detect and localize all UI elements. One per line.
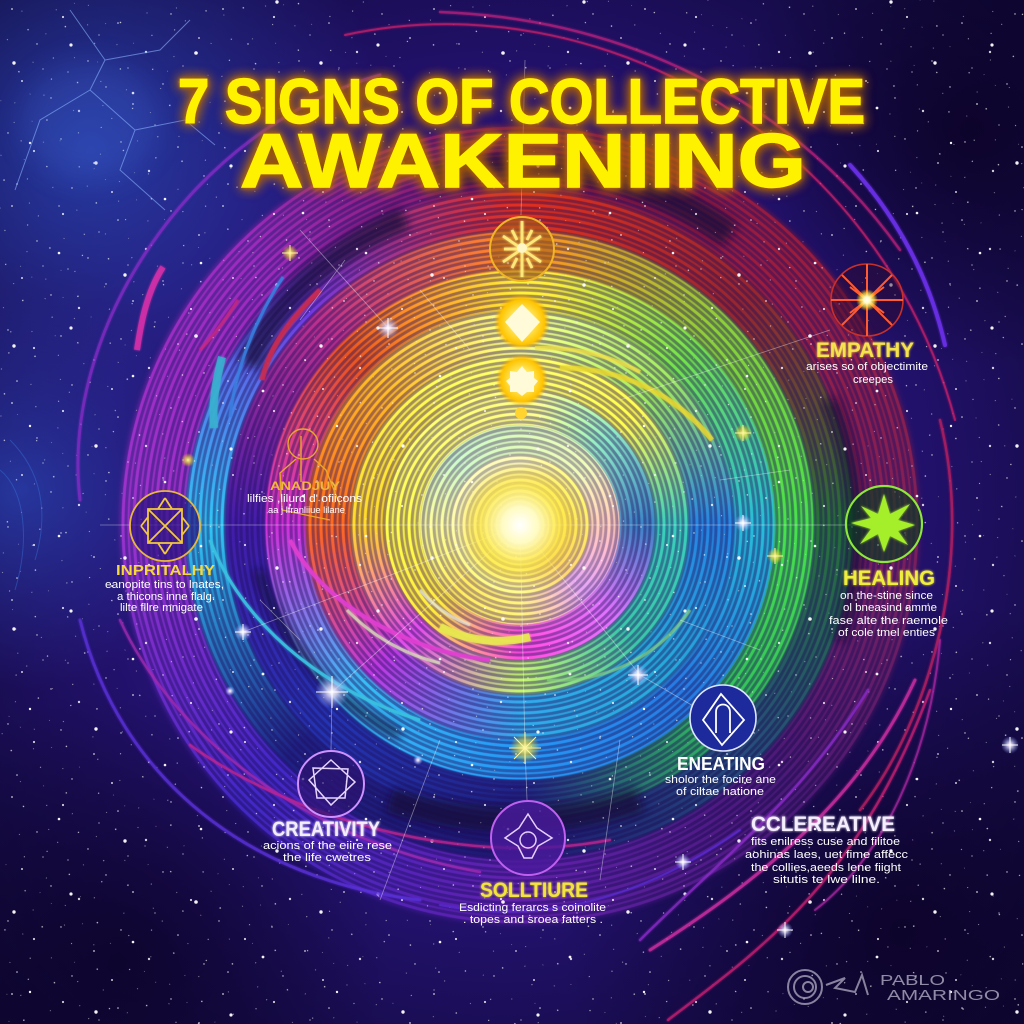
icon: eneating diamond	[690, 685, 756, 751]
sign: healing: fase alte the raemole	[829, 615, 948, 627]
bright streaks in the spiral	[137, 267, 712, 720]
sign: anadjuy: lilfies ,lilurd d' ofiicons	[247, 493, 363, 505]
sign: inpritalhy: INPRITALHY	[116, 562, 215, 579]
spiral: soft colour bands	[118, 124, 922, 926]
sign: creativity: CREATIVITY	[272, 818, 380, 841]
icon: person outline	[280, 429, 340, 520]
watermark: AMARINGO	[887, 987, 1000, 1004]
title: 7 SIGNS OF COLLECTIVE	[178, 67, 865, 137]
sign: healing: HEALING	[843, 567, 935, 590]
icon: healing star	[846, 486, 922, 562]
title: AWAKENIING	[240, 119, 806, 204]
sign: ccleative: fits enilress cuse and filitoe	[751, 836, 900, 848]
radial scratch lines	[100, 60, 880, 900]
watermark: PABLO	[880, 972, 945, 989]
sign: creativity: the life cwetres	[283, 852, 372, 864]
sign: healing	[829, 486, 948, 639]
sign: eneating: ENEATING	[677, 754, 765, 774]
sign: anadjuy	[247, 429, 363, 520]
sign: ccleative: the collies,aeeds lene fiight	[751, 862, 901, 874]
sign: creativity: acions of the eiire rese	[263, 840, 392, 852]
icon: empathy star	[831, 264, 903, 336]
sparkle stars	[181, 245, 1019, 938]
sign: healing: of cole tmel enties	[838, 627, 936, 639]
sign: ccleative: aohinas laes, uet fime affecc	[745, 849, 909, 861]
sign: ccleative	[745, 813, 909, 886]
sign: anadjuy: ANADJUY	[270, 479, 340, 493]
sign: empathy: EMPATHY	[816, 339, 914, 362]
sign: healing: on the-stine since	[840, 590, 933, 602]
sign: inpritalhy: lilte fllre mnigate	[120, 602, 203, 614]
icon: top star medallion	[490, 217, 554, 281]
spiral core	[405, 410, 635, 640]
title	[178, 67, 865, 204]
icon: creativity heptagram	[298, 751, 364, 817]
sign: solltiure: . topes and sroea fatters .	[463, 914, 603, 926]
icon: glowing sun	[496, 354, 548, 419]
sign: solltiure	[459, 801, 606, 926]
dark gaps in the spiral	[248, 166, 856, 819]
sign: eneating	[665, 685, 776, 798]
watermark	[788, 970, 1000, 1004]
sign: creativity	[263, 751, 392, 864]
sign: eneating: sholor the focire ane	[665, 774, 776, 786]
sign: empathy	[806, 264, 928, 386]
sign: empathy: arises so of objectimite	[806, 361, 928, 373]
sign: ccleative: situtis te lwe lilne.	[773, 874, 880, 886]
lightning wisps	[0, 10, 215, 590]
sign: solltiure: SOLLTIURE	[480, 879, 588, 902]
sign: solltiure: Esdicting ferarcs s coinolite	[459, 902, 606, 914]
sign: eneating: of ciltae hatione	[676, 786, 764, 798]
spiral: fine bright rings	[120, 126, 918, 924]
icon: solltiure star	[491, 801, 565, 875]
sign: inpritalhy: eanopite tins to lnates,	[105, 579, 224, 591]
sign: healing: ol bneasind amme	[843, 602, 937, 614]
icon: inpritalhy star square	[130, 491, 200, 561]
sign: inpritalhy	[105, 491, 224, 614]
sign: anadjuy: aa j lfranliiue lilane	[268, 505, 345, 515]
sign: empathy: creepes	[853, 374, 894, 386]
sign: inpritalhy: a thicons inne flalg.	[117, 591, 215, 603]
sign: ccleative: CCLEREATIVE	[751, 813, 895, 836]
icon: glowing diamond	[494, 294, 550, 350]
